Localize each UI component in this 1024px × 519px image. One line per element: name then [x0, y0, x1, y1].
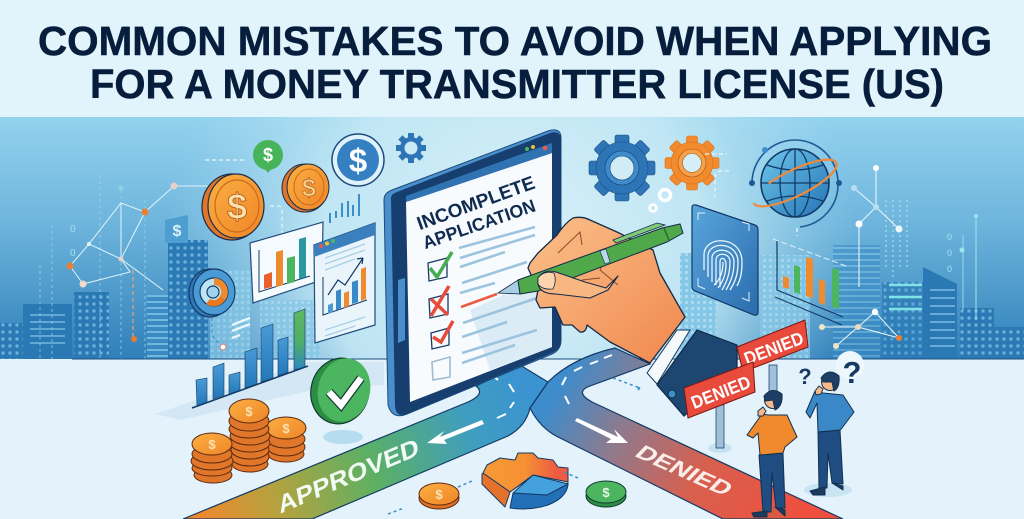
sign post — [708, 365, 777, 453]
dollar building badge: $ — [173, 223, 182, 240]
chart: right bars — [773, 239, 846, 325]
road: denied — [530, 348, 843, 519]
sign: denied back: DENIED — [741, 328, 806, 369]
icon: orange gear — [665, 136, 719, 190]
icon: question marks — [798, 351, 864, 390]
right arrow — [575, 418, 628, 443]
road: approved — [183, 365, 548, 519]
checklist — [428, 227, 537, 380]
right network lines — [819, 165, 902, 349]
bar chart: growth — [192, 309, 308, 408]
stack 1 — [191, 433, 233, 483]
heading: incomplete application: INCOMPLETE — [414, 173, 538, 235]
left arrow — [427, 420, 484, 444]
dollar building badge — [165, 215, 188, 243]
right buildings: 0 — [947, 232, 952, 242]
hand — [528, 217, 685, 363]
pie gear chart — [482, 453, 568, 509]
stack 2 — [229, 399, 270, 472]
icon: blue coin: $ — [349, 142, 367, 179]
icon: large orange coin: $ — [227, 186, 247, 227]
icon: globe — [705, 140, 842, 236]
coin stacks — [191, 399, 306, 483]
road label: DENIED — [630, 441, 739, 500]
person: blue shirt — [804, 372, 854, 497]
coin stacks: $ — [245, 404, 253, 419]
road label: APPROVED — [276, 433, 421, 519]
side handle — [398, 278, 405, 343]
title band — [0, 0, 1024, 117]
mini signal bars — [330, 194, 359, 223]
stack 3 — [266, 417, 306, 462]
icon: question marks: ? — [798, 364, 812, 389]
title line 2: FOR A MONEY TRANSMITTER LICENSE (US) — [90, 61, 944, 107]
tablet — [384, 130, 561, 416]
left buildings: 0 — [70, 224, 76, 235]
icon: white gears — [650, 190, 670, 212]
cuff — [647, 330, 690, 384]
icon: fingerprint card — [692, 205, 758, 315]
sleeve — [657, 330, 737, 416]
icon: medium orange coin — [282, 164, 329, 212]
ground — [0, 359, 1024, 519]
coin stacks: $ — [208, 437, 216, 452]
green coin bottom: $ — [602, 485, 610, 500]
icon: blue coin — [332, 134, 384, 186]
icon: blue gear — [589, 135, 655, 201]
thumb — [538, 271, 618, 298]
green coin bottom — [564, 472, 626, 507]
sign: denied front: DENIED — [688, 372, 753, 413]
small coin: $ — [435, 487, 443, 502]
heading: incomplete application: APPLICATION — [420, 196, 538, 253]
pen — [498, 280, 520, 294]
right buildings — [680, 200, 1024, 359]
chart card: trend — [314, 223, 375, 343]
title line 1: COMMON MISTAKES TO AVOID WHEN APPLYING — [38, 18, 992, 64]
right buildings: 0 — [947, 248, 952, 258]
icon: small blue gear — [396, 133, 426, 163]
sign: denied front — [684, 362, 755, 418]
icon: green dollar pin — [205, 140, 283, 173]
icon: large orange coin — [202, 174, 282, 240]
small coin — [388, 481, 472, 514]
icon: question marks: ? — [843, 355, 861, 390]
person: orange shirt — [747, 390, 797, 518]
icon: check badge — [304, 352, 377, 444]
coin stacks: $ — [282, 421, 290, 436]
right buildings: 0 — [947, 264, 952, 274]
icon: medium orange coin: $ — [302, 174, 316, 202]
left buildings: 0 — [70, 248, 76, 259]
dashed arrow — [613, 378, 640, 391]
chart card: bars — [250, 222, 323, 303]
left buildings — [0, 175, 320, 359]
left network lines — [66, 182, 210, 290]
icon: donut coin — [189, 269, 250, 350]
skyline background — [0, 117, 1024, 359]
icon: green dollar pin: $ — [263, 145, 273, 165]
tablet screen — [406, 153, 552, 402]
hand with pen — [498, 217, 737, 416]
